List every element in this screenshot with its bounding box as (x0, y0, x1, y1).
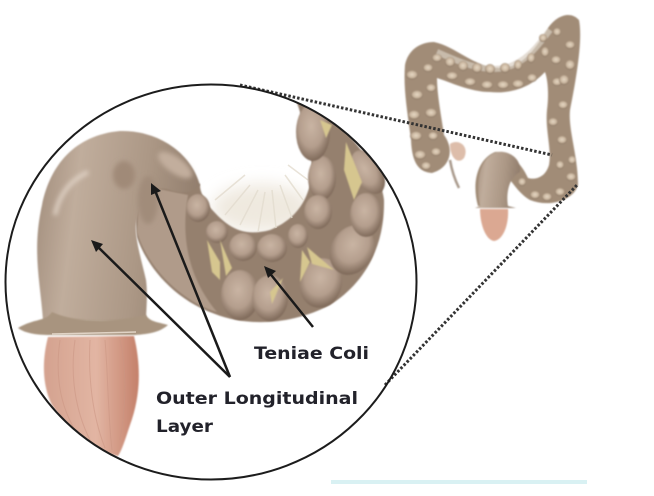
colon haustra beads (406, 28, 576, 201)
label: Outer Longitudinal Layer: Layer (156, 417, 214, 436)
mesentery band (437, 30, 550, 69)
fatty appendages (207, 120, 362, 304)
overview rectum (475, 152, 520, 208)
panel: magnified circle illustration (18, 100, 392, 456)
bottom pale cyan strip (331, 480, 587, 484)
magnified rectum body (37, 131, 200, 322)
rectum flange (18, 312, 168, 335)
rectum folds (55, 147, 196, 224)
arrows: outer longitudinal layer (91, 183, 230, 377)
appendix and cecum (450, 142, 466, 161)
muscle striations (58, 340, 111, 448)
circle outline (6, 84, 416, 480)
magnified colon loop (136, 100, 384, 322)
label: Outer Longitudinal Layer: Outer Longitudinal (156, 389, 358, 408)
connector: dotted zoom lines (240, 85, 578, 385)
arrow: teniae coli (264, 266, 313, 327)
overview anal canal (480, 209, 508, 241)
overview: whole colon illustration (405, 15, 580, 241)
label: Teniae Coli: Teniae Coli (254, 344, 369, 363)
colon tube (405, 15, 580, 206)
haustra (186, 103, 392, 321)
anal canal muscle (44, 336, 139, 456)
descending limb of rectum (137, 185, 217, 312)
magnified mesentery haze (212, 184, 312, 232)
label: Outer Longitudinal Layer (156, 389, 358, 436)
mesentery streaks (215, 165, 308, 232)
